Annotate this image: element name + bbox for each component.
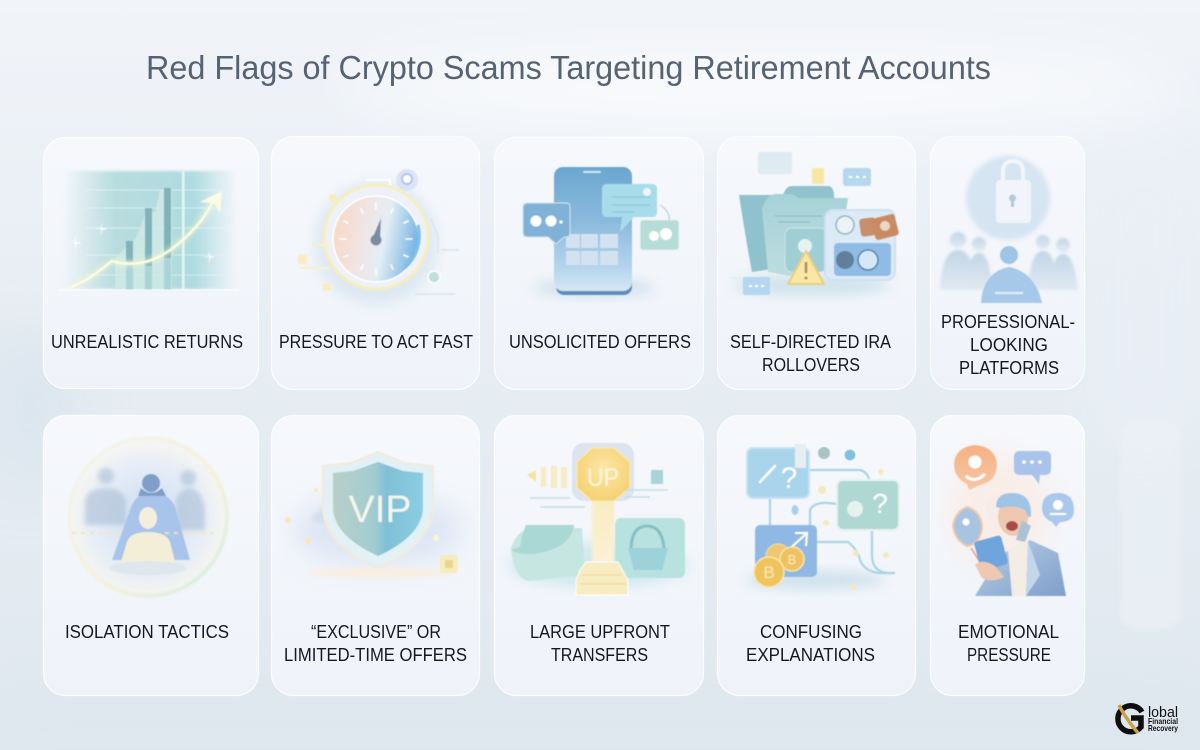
icon: question boxes and coins: B <box>763 563 775 582</box>
label: PROFESSIONAL- <box>941 312 1075 332</box>
label <box>530 622 670 665</box>
icon: distressed man with phone and bubbles <box>950 445 1074 596</box>
label: PLATFORMS <box>959 358 1059 378</box>
icon: question boxes and coins: ? <box>872 488 888 519</box>
label: PRESSURE TO ACT FAST <box>279 332 473 352</box>
label: TRANSFERS <box>551 645 648 665</box>
icon: padlock above silhouettes <box>940 156 1078 303</box>
panel: large upfront transfers <box>494 416 704 696</box>
panel: pressure to act fast <box>272 136 480 390</box>
panel: isolation tactics <box>44 416 258 696</box>
label <box>941 312 1075 378</box>
panel: confusing explanations <box>718 416 916 696</box>
icon: rising chart <box>58 171 238 290</box>
label <box>958 622 1059 665</box>
icon: question boxes and coins <box>745 444 899 590</box>
panel: unsolicited offers <box>494 138 704 390</box>
label <box>730 332 891 375</box>
icon: question boxes and coins: B <box>788 552 796 567</box>
panel: exclusive or limited-time offers <box>272 416 480 696</box>
label: LIMITED-TIME OFFERS <box>284 645 467 665</box>
icon: stopwatch gauge <box>298 169 459 305</box>
label <box>746 622 875 665</box>
panel: unrealistic returns <box>44 138 258 388</box>
logo: Global Financial Recovery <box>1118 704 1178 733</box>
label: CONFUSING <box>760 622 862 642</box>
label: ROLLOVERS <box>762 355 860 375</box>
label <box>284 622 467 665</box>
label: “EXCLUSIVE” OR <box>311 622 441 642</box>
label: SELF-DIRECTED IRA <box>730 332 891 352</box>
icon: VIP shield: VIP <box>348 489 412 531</box>
icon: UP sign with wallet and bag: UP <box>587 464 619 492</box>
label: EMOTIONAL <box>958 622 1059 642</box>
panel: self-directed IRA rollovers <box>718 136 916 390</box>
icon: question boxes and coins: ? <box>781 462 797 495</box>
logo: Global Financial Recovery: Financial <box>1148 716 1178 726</box>
label: UNREALISTIC RETURNS <box>51 332 243 352</box>
label: ISOLATION TACTICS <box>65 622 229 642</box>
logo: Global Financial Recovery: Recovery <box>1148 723 1178 733</box>
panel: emotional pressure <box>930 416 1084 696</box>
label: UNSOLICITED OFFERS <box>509 332 691 352</box>
icon: UP sign with wallet and bag <box>508 443 688 595</box>
title: Red Flags of Crypto Scams Targeting Retirement Accounts <box>146 49 991 86</box>
icon: VIP shield <box>285 452 463 578</box>
label: LOOKING <box>970 335 1048 355</box>
logo: Global Financial Recovery: lobal <box>1148 704 1178 721</box>
label: EXPLANATIONS <box>746 645 875 665</box>
icon: person inside glass sphere <box>69 438 227 596</box>
icon: phone with message bubbles <box>523 167 679 297</box>
label: PRESSURE <box>967 645 1051 665</box>
icon: folders, warning and apps <box>730 152 899 296</box>
panel: professional-looking platforms <box>930 136 1084 390</box>
label: LARGE UPFRONT <box>530 622 670 642</box>
